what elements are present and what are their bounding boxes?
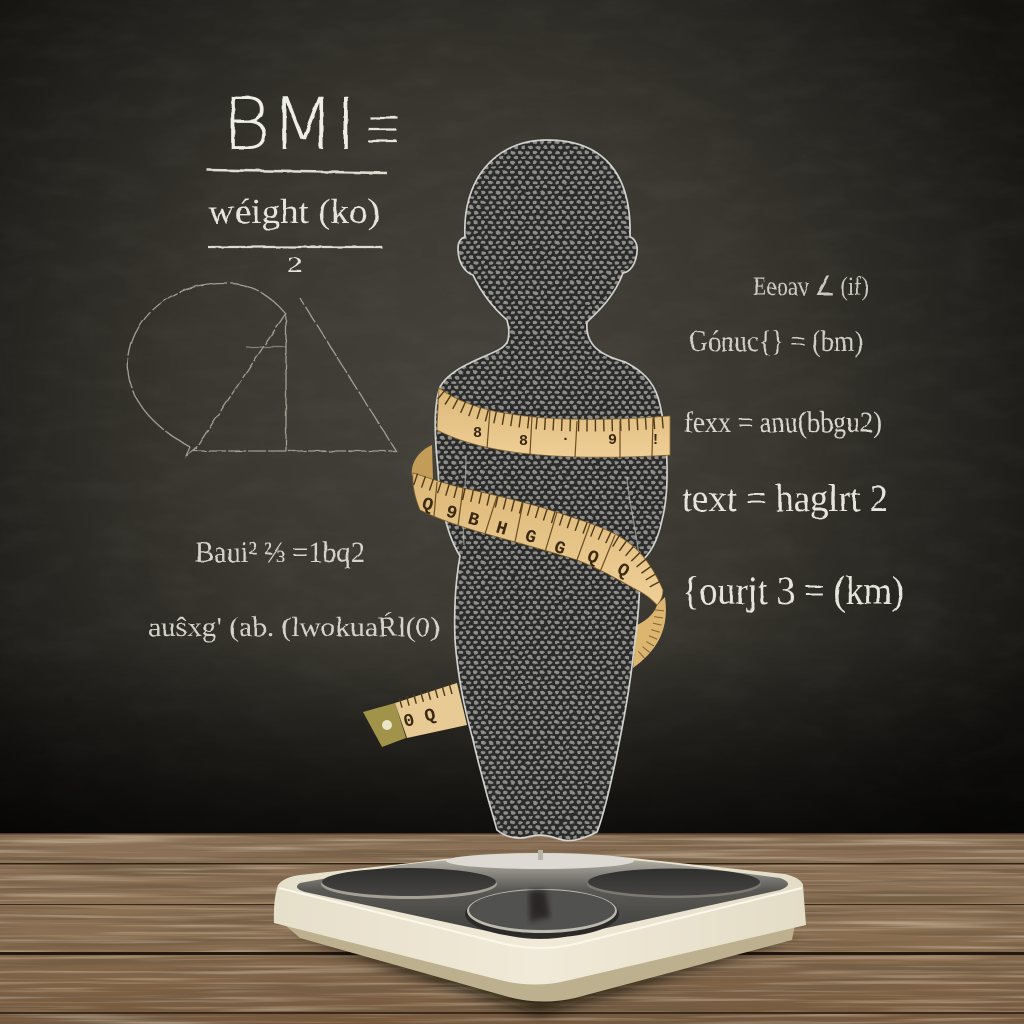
right chalk equations — [682, 272, 904, 613]
tape ticks — [415, 479, 658, 590]
weight label: wéight (ko) — [208, 192, 380, 231]
tape end strip — [395, 683, 467, 738]
human silhouette figure — [430, 130, 670, 850]
tape measure: lower band: G — [551, 538, 568, 560]
tape measure: lower band: Q — [584, 547, 601, 570]
equation line 3: fexx = anu(bbgu2) — [684, 406, 882, 439]
tape numbers: 8 — [473, 425, 482, 442]
left chalk equations — [148, 536, 440, 642]
denominator: 2 — [287, 252, 303, 277]
equation 1: Baui² ⅔ =1bq2 — [195, 536, 365, 569]
metal tip — [363, 703, 406, 747]
tape measure: lower band: Q — [613, 560, 633, 583]
equals mark — [368, 118, 398, 141]
tape ticks — [441, 394, 669, 426]
weighing plate left — [321, 868, 497, 899]
tape measure: upper band: ! — [651, 432, 660, 449]
tape marks: 0 Q — [402, 706, 438, 733]
scale top panel — [297, 856, 788, 939]
chalk formula: BMI — [207, 82, 398, 277]
title BMI: BMI — [222, 82, 357, 166]
scale base — [285, 915, 797, 1002]
wooden table — [0, 833, 1024, 1024]
tape measure: upper band: 9 — [608, 432, 617, 449]
tape measure: upper band — [437, 388, 670, 458]
upper fraction line — [207, 170, 387, 173]
equation line 4: text = haglrt 2 — [682, 478, 888, 520]
tape measure: lower band: B — [465, 510, 481, 532]
tape measure: upper band: 8 — [519, 433, 528, 450]
tape measure: loose end — [363, 683, 467, 747]
tape measure: back sections — [412, 445, 666, 668]
arm contour lines — [463, 455, 639, 558]
bathroom scale — [274, 850, 806, 1014]
tape measure: lower band — [413, 473, 663, 605]
tape symbols: Q — [419, 495, 435, 517]
tape measure: upper band: · — [561, 431, 570, 448]
equation line 1: Eeoav ∠ (if) — [753, 272, 869, 301]
weighing plate front — [465, 889, 619, 938]
tape measure: lower band: H — [493, 519, 509, 541]
lower fraction line — [208, 246, 382, 248]
figure outline — [435, 140, 667, 841]
equation line 2: Gónuc{} = (bm) — [689, 325, 863, 358]
rim highlight — [279, 888, 802, 948]
scale shadow — [300, 935, 795, 1014]
equation line 5: {ourjt 3 = (km) — [682, 568, 904, 613]
tape measure: lower band: G — [522, 527, 539, 549]
tape back right section — [633, 597, 666, 668]
tape measure: lower band: 9 — [443, 503, 459, 525]
equation 2: auŝxg' (ab. (lwokuaŔl(0) — [148, 612, 440, 642]
dial window — [446, 853, 634, 869]
weighing plate right — [587, 868, 761, 898]
chalk geometry diagram — [128, 283, 396, 456]
scale body — [274, 853, 806, 984]
tape back left curl — [412, 445, 433, 480]
